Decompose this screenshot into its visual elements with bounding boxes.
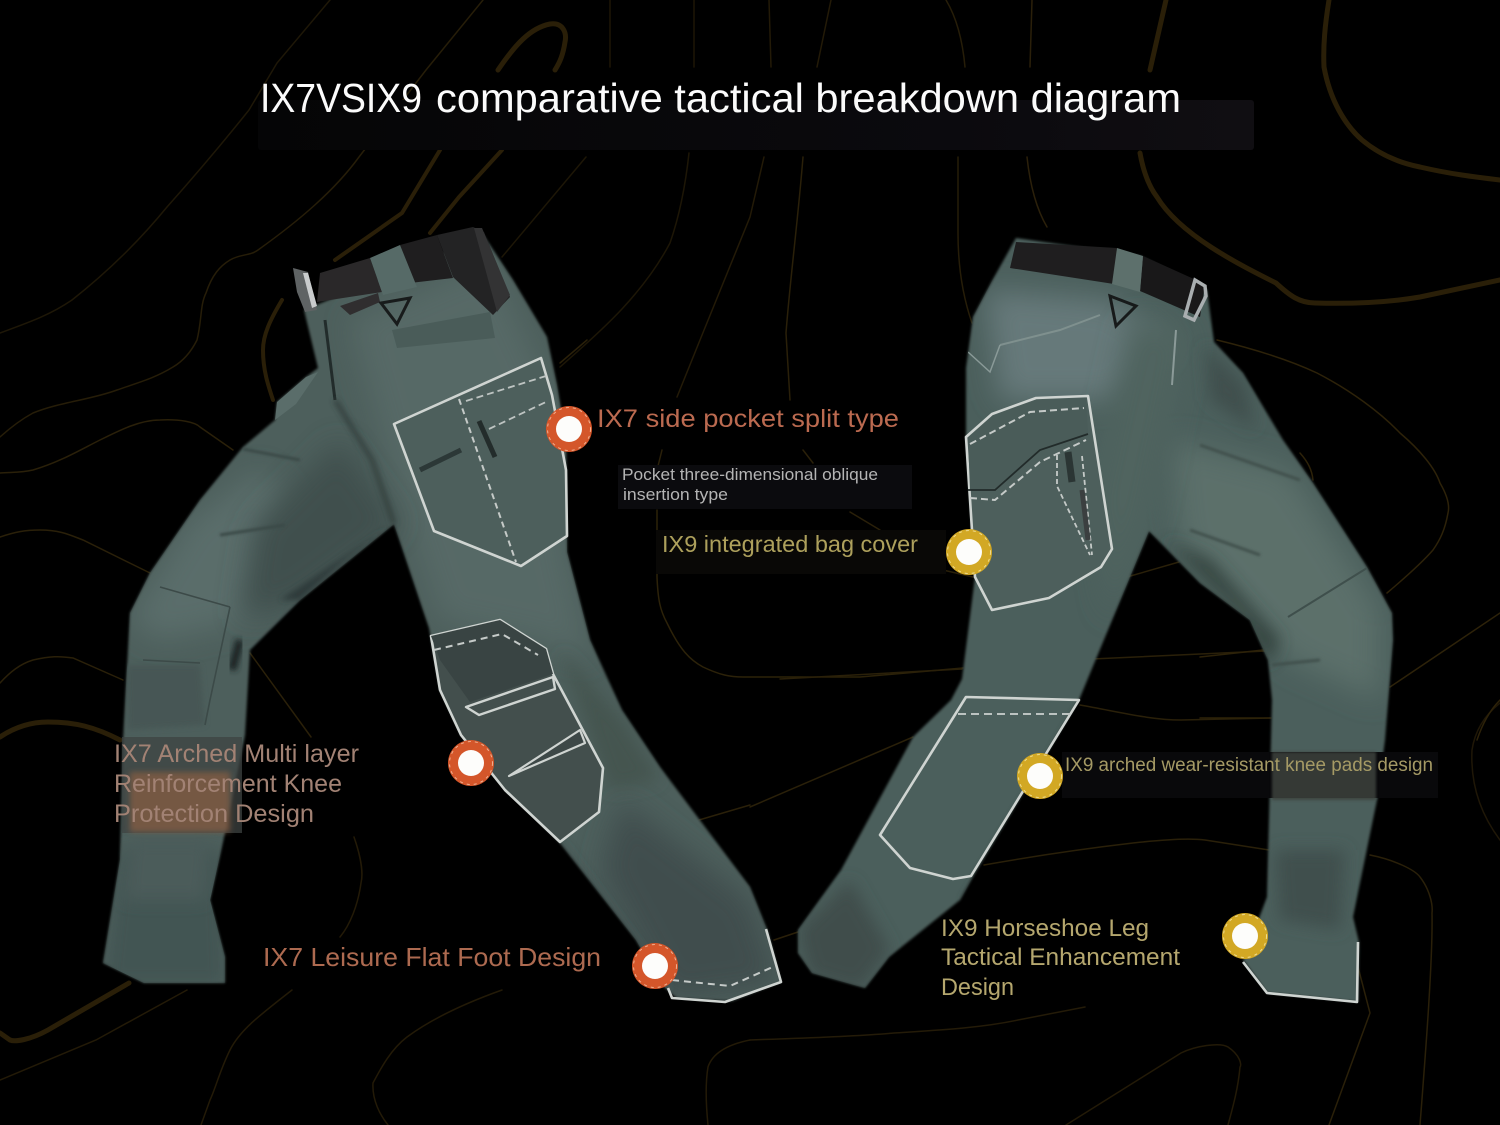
marker (448, 740, 494, 786)
pants body (798, 238, 1393, 1002)
label tint warm (130, 772, 230, 832)
title: IX7VSIX9 (260, 75, 422, 121)
lower pocket stitching (434, 634, 538, 655)
shading (798, 290, 1380, 990)
upper pocket detail (420, 376, 548, 562)
pants: IX9 right (798, 238, 1393, 1002)
marker (1017, 753, 1063, 799)
hip patch (392, 312, 495, 348)
callout: IX9 horseshoe leg (941, 913, 1268, 1001)
callout: IX9 knee pads (1017, 752, 1438, 800)
lower pocket outline (431, 620, 603, 842)
label: IX9 integrated bag cover (662, 531, 918, 557)
side pocket outline (966, 396, 1112, 610)
d-ring (381, 298, 410, 324)
callout: IX9 bag cover (656, 529, 992, 575)
label: IX7 Leisure Flat Foot Design (263, 942, 601, 972)
pocket flap (968, 398, 1092, 555)
label tint (122, 737, 242, 833)
knee pad outline (880, 697, 1079, 879)
marker (632, 943, 678, 989)
marker (1222, 913, 1268, 959)
callout: IX7 knee protection (114, 737, 494, 833)
label backing (1062, 752, 1438, 798)
title backing strip (258, 100, 1254, 150)
text block: pocket note (618, 465, 912, 509)
marker (546, 406, 592, 452)
label (941, 915, 1180, 1001)
buckle (1185, 280, 1206, 320)
label: IX9 Horseshoe Leg (941, 915, 1149, 942)
pants body (103, 236, 781, 1001)
label: Reinforcement Knee (114, 770, 342, 798)
callout: IX7 flat foot (263, 942, 678, 989)
upper pocket outline (394, 358, 567, 566)
label backing (656, 530, 946, 574)
holster (437, 227, 510, 315)
pants: IX7 left (103, 227, 781, 1002)
belt (1010, 242, 1117, 284)
label: IX7 Arched Multi layer (114, 740, 359, 768)
rear belt tab (275, 372, 318, 420)
belt (317, 258, 382, 302)
label: IX9 arched wear-resistant knee pads design (1065, 755, 1433, 776)
title: comparative tactical breakdown diagram (436, 75, 1181, 121)
label: Tactical Enhancement (941, 944, 1180, 971)
leg showing through backing (1272, 752, 1376, 800)
callout: IX7 side pocket (546, 405, 899, 452)
text block: pocket note: insertion type (623, 485, 728, 504)
hem outline (1243, 942, 1358, 1002)
label: IX7 side pocket split type (597, 405, 899, 433)
buckle (293, 268, 317, 312)
text block: pocket note: Pocket three-dimensional oblique (622, 465, 878, 484)
label: Protection Design (114, 800, 314, 828)
shading (105, 260, 780, 1000)
marker (946, 529, 992, 575)
label (114, 740, 359, 828)
label: Design (941, 974, 1014, 1001)
d-ring (1110, 296, 1136, 326)
belt loop (1112, 248, 1143, 292)
belt flap (340, 293, 380, 315)
belt loop (370, 245, 417, 295)
hem outline (668, 929, 781, 1002)
